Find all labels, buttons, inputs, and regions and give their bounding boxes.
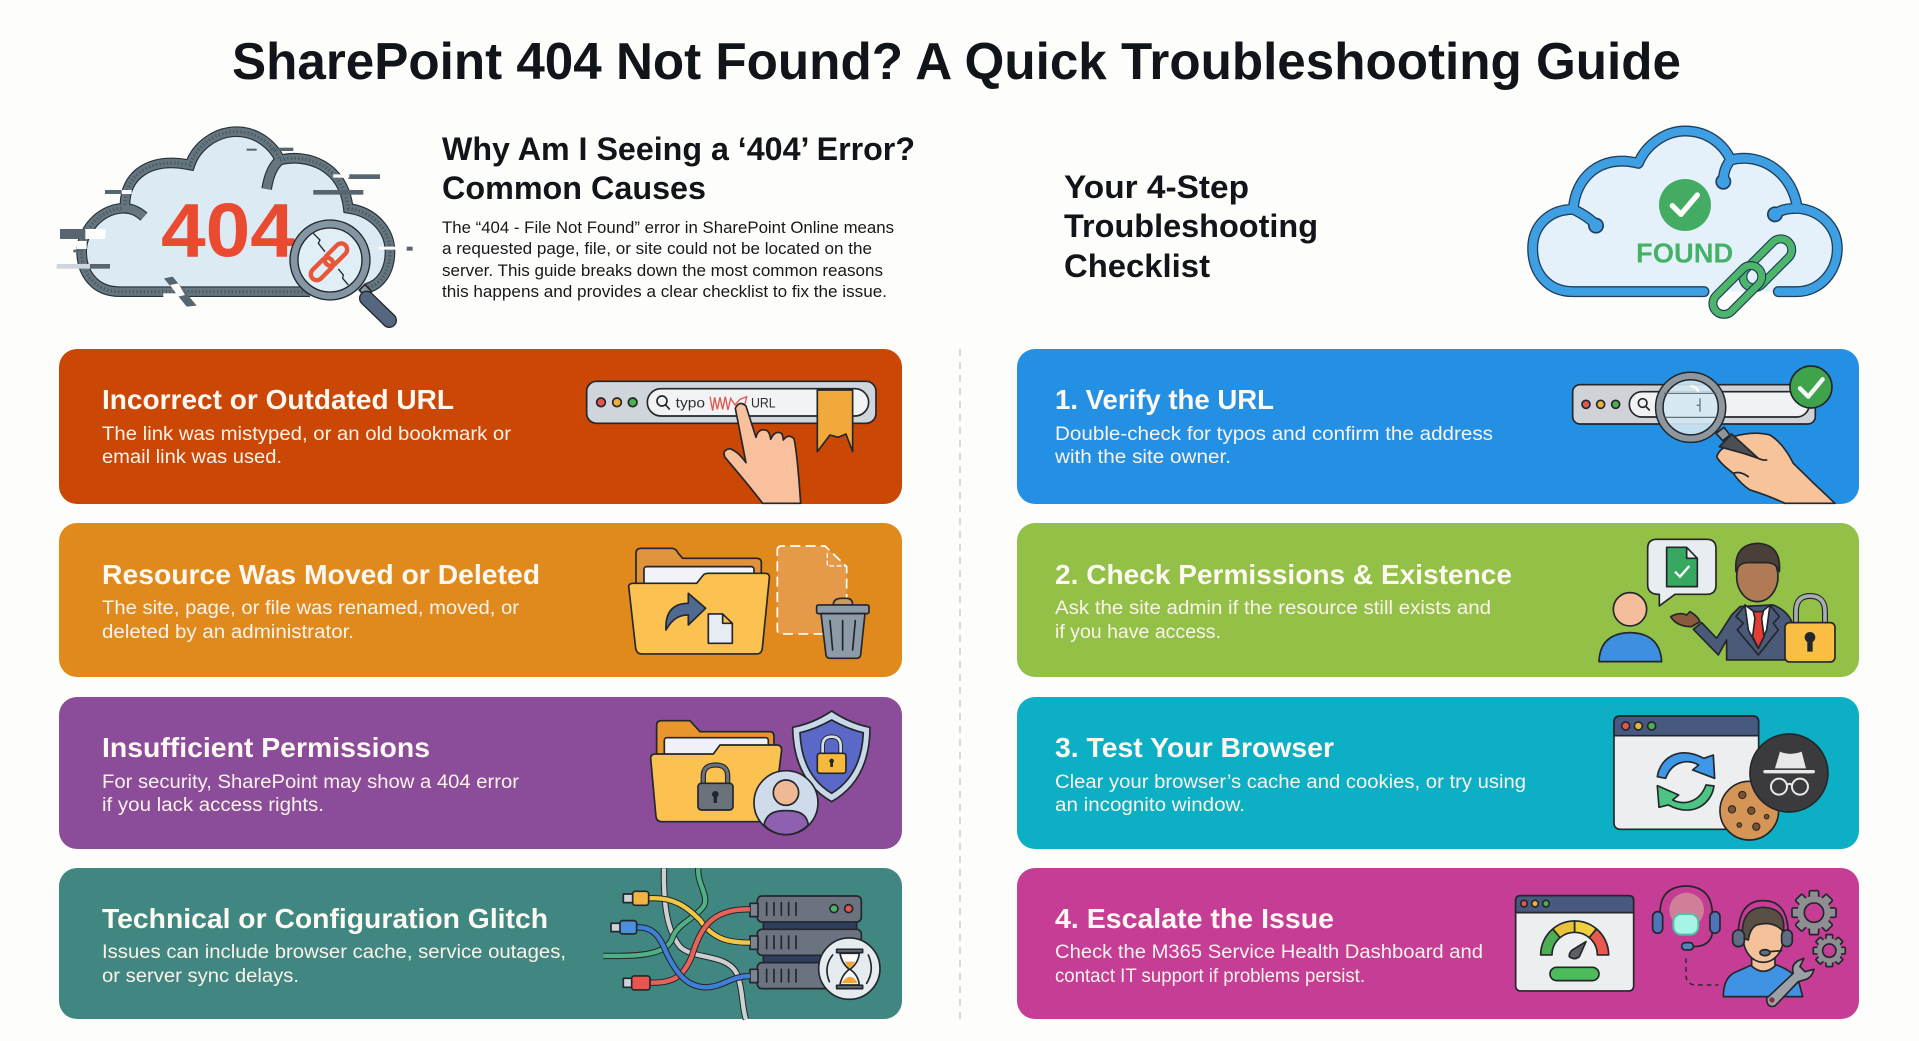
icon: magnifier over address bar with hand bbox=[1573, 366, 1835, 503]
icon: broken cloud with 404 and magnifier bbox=[57, 132, 413, 320]
card description: deleted by an administrator. bbox=[102, 622, 354, 643]
check badge bbox=[1659, 179, 1711, 231]
card description: For security, SharePoint may show a 404 error bbox=[102, 772, 520, 793]
heading: why am I seeing a 404 error: Why Am I Seeing a ‘404’ Error? bbox=[442, 131, 915, 167]
card description: The site, page, or file was renamed, moved, or bbox=[102, 598, 520, 619]
panel: incorrect or outdated URL bbox=[59, 349, 902, 504]
card description: Issues can include browser cache, service outages, bbox=[102, 942, 566, 963]
card description bbox=[102, 772, 520, 816]
panel: step 2 check permissions and existence bbox=[1017, 523, 1859, 677]
404 text: 404 bbox=[161, 189, 295, 274]
panel: insufficient permissions bbox=[59, 697, 902, 849]
heading: your 4-step troubleshooting checklist: Troubleshooting bbox=[1064, 208, 1318, 244]
card description: Check the M365 Service Health Dashboard and bbox=[1055, 942, 1483, 963]
card description bbox=[102, 942, 566, 987]
icon: folder, ghost file and trash bbox=[629, 546, 869, 658]
intro text block: a requested page, file, or site could not be located on the bbox=[442, 239, 872, 258]
heading: your 4-step troubleshooting checklist: Checklist bbox=[1064, 248, 1210, 284]
icon: IT support agent with gears and wrench bbox=[1653, 886, 1845, 1006]
FOUND label: FOUND bbox=[1636, 238, 1733, 269]
card description: or server sync delays. bbox=[102, 966, 299, 987]
icon: found cloud with check and chain bbox=[1533, 131, 1837, 319]
card description: Ask the site admin if the resource still exists and bbox=[1055, 598, 1491, 619]
icon: browser refresh, cookie and incognito bbox=[1614, 716, 1828, 840]
icon: health dashboard gauge bbox=[1516, 896, 1634, 991]
heading: why am I seeing a 404 error: Common Causes bbox=[442, 170, 706, 206]
card description: email link was used. bbox=[102, 447, 282, 468]
card description: Clear your browser’s cache and cookies, or try using bbox=[1055, 772, 1526, 793]
heading: your 4-step troubleshooting checklist: Your 4-Step bbox=[1064, 169, 1249, 205]
card heading: Incorrect or Outdated URL bbox=[102, 384, 454, 415]
panel: step 3 test your browser bbox=[1017, 697, 1859, 849]
heading: your 4-step troubleshooting checklist bbox=[1064, 169, 1318, 284]
icon: user asking admin with document and padlock bbox=[1599, 539, 1835, 662]
card description bbox=[102, 424, 512, 468]
card description bbox=[102, 598, 520, 643]
card description: with the site owner. bbox=[1054, 447, 1231, 468]
chain link bbox=[1708, 234, 1796, 319]
card heading: Technical or Configuration Glitch bbox=[102, 903, 548, 934]
intro text block: this happens and provides a clear checklist to fix the issue. bbox=[442, 282, 887, 301]
heading: why am I seeing a 404 error bbox=[442, 131, 915, 206]
card heading: 2. Check Permissions & Existence bbox=[1055, 559, 1512, 590]
card description bbox=[1055, 942, 1483, 987]
intro text block: The “404 - File Not Found” error in SharePoint Online means bbox=[442, 218, 894, 237]
card description bbox=[1055, 772, 1526, 816]
card description bbox=[1055, 598, 1491, 643]
card heading: 3. Test Your Browser bbox=[1055, 732, 1334, 763]
card description: an incognito window. bbox=[1055, 795, 1245, 816]
icon: tangled cables and servers with hourglass bbox=[603, 868, 880, 1019]
card heading: 1. Verify the URL bbox=[1055, 384, 1274, 415]
card description: if you have access. bbox=[1055, 622, 1221, 643]
card heading: Resource Was Moved or Deleted bbox=[102, 559, 540, 590]
card description: contact IT support if problems persist. bbox=[1055, 966, 1365, 987]
card description bbox=[1054, 424, 1493, 468]
panel: technical or configuration glitch bbox=[59, 868, 902, 1019]
icon: locked folder, shield and user bbox=[651, 711, 870, 835]
card heading: Insufficient Permissions bbox=[102, 732, 430, 763]
icon: browser bar with pointing hand bbox=[587, 381, 876, 503]
card description: if you lack access rights. bbox=[102, 795, 324, 816]
card description: The link was mistyped, or an old bookmark or bbox=[102, 424, 512, 445]
icon: browser bar with pointing hand: typo bbox=[676, 394, 705, 410]
card description: Double-check for typos and confirm the address bbox=[1055, 424, 1493, 445]
title: SharePoint 404 Not Found? A Quick Troubleshooting Guide bbox=[232, 33, 1681, 91]
center divider bbox=[959, 349, 961, 1020]
intro text block bbox=[442, 218, 894, 301]
icon: browser bar with pointing hand: URL bbox=[751, 394, 776, 410]
panel: resource was moved or deleted bbox=[59, 523, 902, 677]
intro text block: server. This guide breaks down the most common reasons bbox=[442, 261, 883, 280]
panel: step 1 verify the URL bbox=[1017, 349, 1859, 504]
panel: step 4 escalate the issue bbox=[1017, 868, 1859, 1019]
magnifier with broken link bbox=[294, 224, 389, 320]
card heading: 4. Escalate the Issue bbox=[1055, 903, 1334, 934]
